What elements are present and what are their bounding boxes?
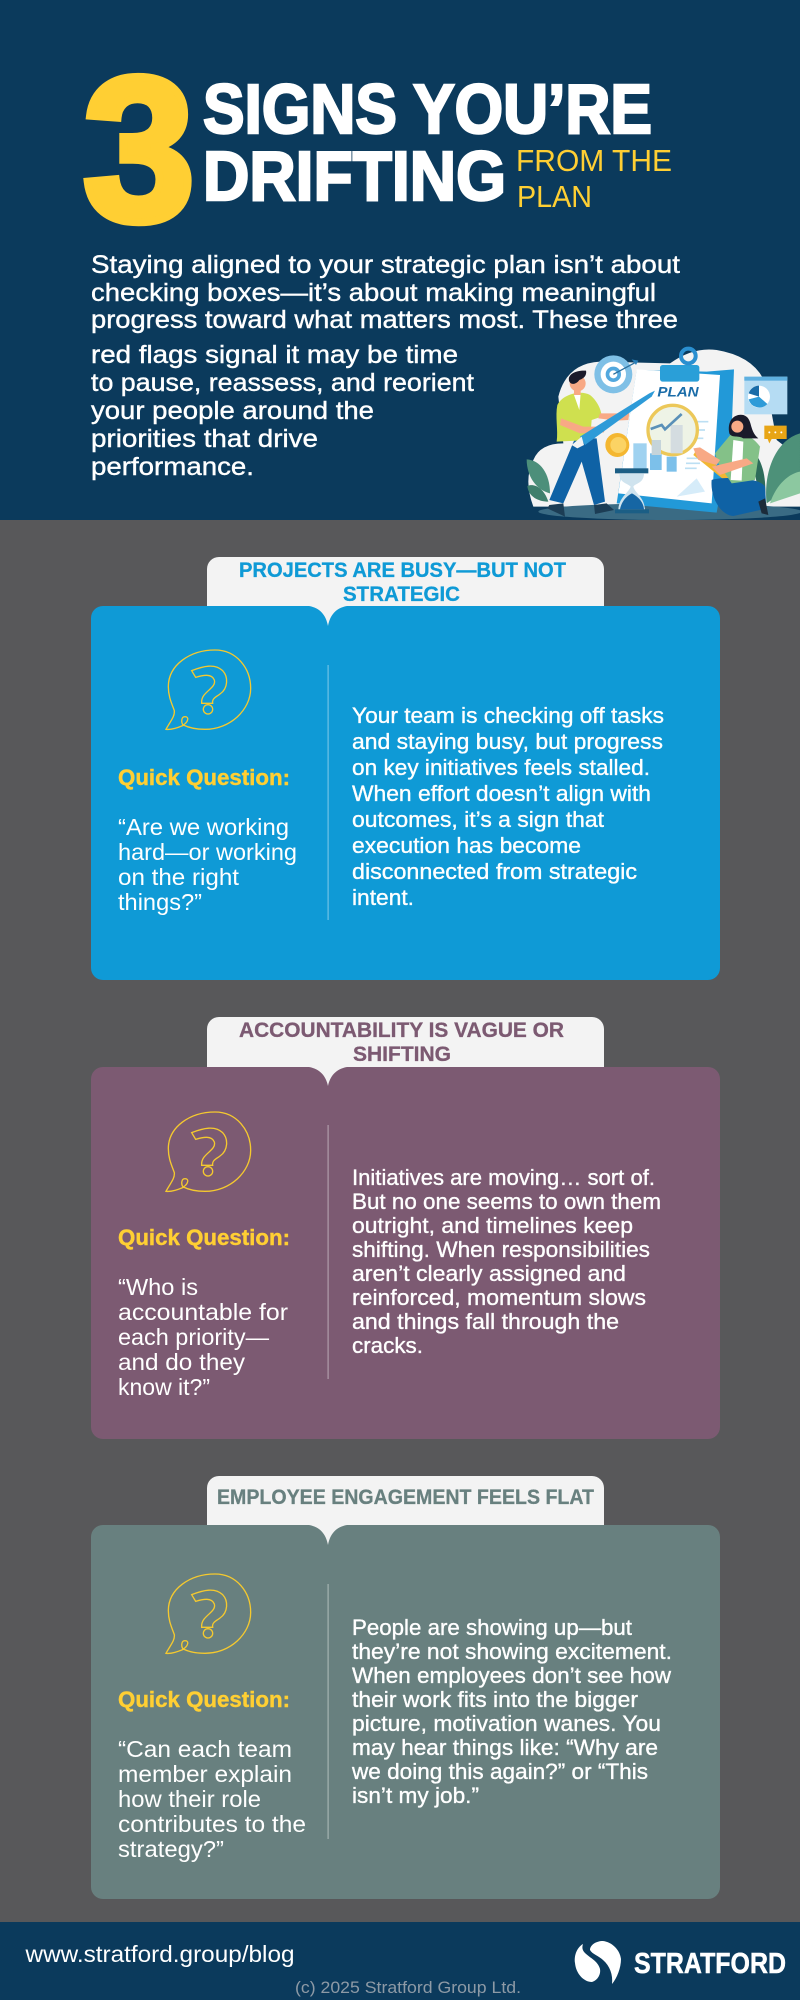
body text 1: on key initiatives feels stalled. [352, 755, 650, 780]
logo mark [575, 1941, 621, 1984]
footer url: www.stratford.group/blog [24, 1941, 295, 1967]
body text 3: we doing this again?” or “This [351, 1759, 648, 1784]
plan label: PLAN [657, 384, 700, 400]
quick question text 2: each priority— [118, 1324, 269, 1350]
intro paragraph: Staying aligned to your strategic plan isn’t about [91, 251, 680, 279]
intro paragraph: performance. [91, 453, 254, 481]
icon: question bubble 2 [166, 1112, 251, 1191]
quick question text 1: “Are we working [118, 814, 289, 840]
heading 1: PROJECTS ARE BUSY—BUT NOT [239, 559, 566, 582]
panel: employee engagement [91, 1476, 720, 1899]
heading tab 2 [207, 1017, 604, 1090]
quick question text 1: things?” [118, 889, 202, 915]
quick question text 3: member explain [118, 1761, 292, 1787]
body text 3: they’re not showing excitement. [352, 1639, 672, 1664]
panel: accountability is vague [91, 1017, 720, 1439]
card 1 body [91, 606, 720, 980]
title line: signs you're: SIGNS YOU’RE [203, 70, 652, 148]
body text 2: outright, and timelines keep [352, 1213, 633, 1238]
title [83, 35, 672, 264]
page background [0, 520, 800, 1922]
heading 2: ACCOUNTABILITY IS VAGUE OR [239, 1019, 564, 1042]
body text 2: reinforced, momentum slows [352, 1285, 646, 1310]
big number 3: 3 [83, 35, 195, 264]
intro paragraph: checking boxes—it’s about making meaningful [91, 279, 656, 307]
body text 1: Your team is checking off tasks [352, 703, 664, 728]
quick question text 1 [118, 814, 297, 915]
heading tab 3 [207, 1476, 604, 1550]
card 2 body [91, 1067, 720, 1439]
body text 2: cracks. [352, 1333, 423, 1358]
quick question text 3 [118, 1736, 306, 1862]
intro paragraph: priorities that drive [91, 425, 318, 453]
quick question text 1: hard—or working [118, 839, 297, 865]
body text 2: and things fall through the [352, 1309, 619, 1334]
body text 1: outcomes, it’s a sign that [352, 807, 604, 832]
quick question text 2: know it?” [118, 1374, 210, 1400]
body text 2: shifting. When responsibilities [352, 1237, 650, 1262]
body text 1: and staying busy, but progress [352, 729, 663, 754]
quick question label 3: Quick Question: [118, 1687, 290, 1712]
body text 1: execution has become [352, 833, 581, 858]
body text 1: disconnected from strategic [352, 859, 637, 884]
body text 3: picture, motivation wanes. You [352, 1711, 661, 1736]
body text 3 [351, 1615, 672, 1808]
quick question text 2: “Who is [118, 1274, 198, 1300]
card 3 body [91, 1525, 720, 1899]
header band [0, 0, 800, 520]
body text 3: isn’t my job.” [352, 1783, 479, 1808]
title line: plan: PLAN [517, 179, 592, 214]
quick question text 3: strategy?” [118, 1836, 224, 1862]
panel: projects are busy [91, 557, 720, 980]
intro paragraph: your people around the [91, 397, 374, 425]
illustration: team reviewing plan [527, 349, 800, 520]
heading 3: EMPLOYEE ENGAGEMENT FEELS FLAT [217, 1486, 594, 1509]
heading 2 [239, 1019, 564, 1066]
body text 2: aren’t clearly assigned and [352, 1261, 626, 1286]
title line: drifting: DRIFTING [203, 137, 506, 215]
intro paragraph: progress toward what matters most. These three [91, 306, 678, 334]
quick question text 2 [118, 1274, 288, 1400]
heading 1: STRATEGIC [343, 583, 460, 606]
body text 3: When employees don’t see how [352, 1663, 671, 1688]
quick question text 3: how their role [118, 1786, 261, 1812]
icon: question bubble 1 [166, 650, 251, 729]
quick question text 3: contributes to the [118, 1811, 306, 1837]
body text 1 [352, 703, 664, 910]
footer copyright: (c) 2025 Stratford Group Ltd. [295, 1978, 521, 1997]
body text 3: may hear things like: “Why are [352, 1735, 658, 1760]
title line: from the: FROM THE [516, 143, 672, 178]
icon: question bubble 3 [166, 1574, 251, 1653]
body text 2 [352, 1165, 661, 1358]
quick question label 1: Quick Question: [118, 765, 290, 790]
intro paragraph: red flags signal it may be time [91, 341, 458, 369]
body text 3: People are showing up—but [352, 1615, 632, 1640]
body text 1: When effort doesn’t align with [352, 781, 651, 806]
quick question label 2: Quick Question: [118, 1225, 290, 1250]
heading 1 [239, 559, 566, 606]
logo [575, 1941, 786, 1984]
body text 2: But no one seems to own them [352, 1189, 661, 1214]
body text 1: intent. [352, 885, 414, 910]
quick question text 2: accountable for [118, 1299, 288, 1325]
intro paragraph: to pause, reassess, and reorient [91, 369, 474, 397]
heading tab 1 [207, 557, 604, 630]
body text 2: Initiatives are moving… sort of. [352, 1165, 655, 1190]
quick question text 1: on the right [118, 864, 240, 890]
body text 3: their work fits into the bigger [352, 1687, 638, 1712]
quick question text 2: and do they [118, 1349, 246, 1375]
heading 2: SHIFTING [353, 1043, 451, 1066]
intro paragraph [91, 251, 680, 481]
quick question text 3: “Can each team [118, 1736, 292, 1762]
footer band [0, 1922, 800, 2000]
